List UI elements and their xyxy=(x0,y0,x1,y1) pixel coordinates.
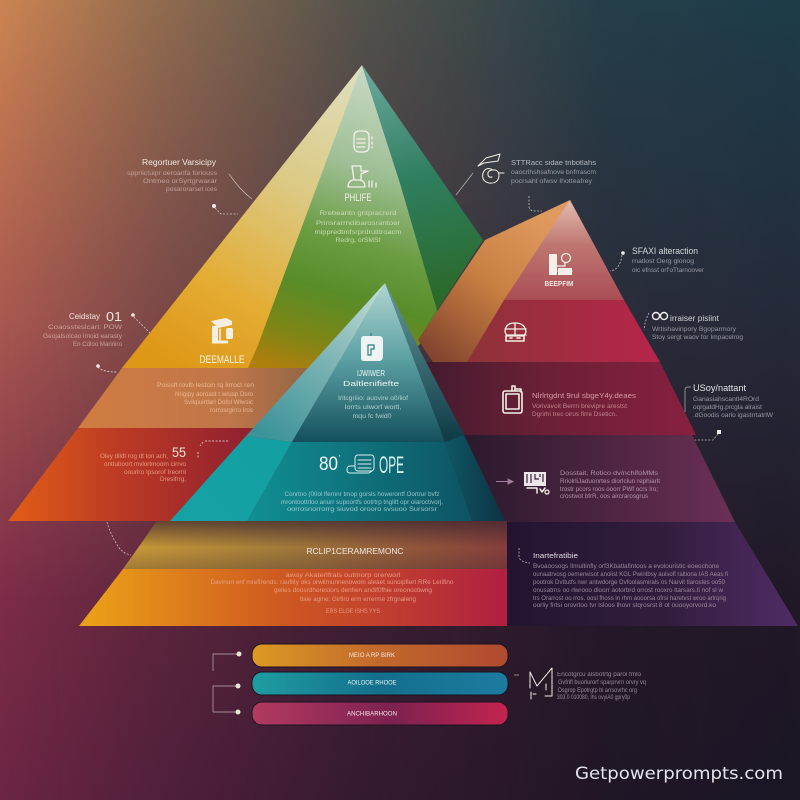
body text: mippredtmfsrprdrulttroacm xyxy=(314,229,402,236)
violet tier content xyxy=(519,548,728,609)
right dark green face xyxy=(362,65,483,340)
connector lines xyxy=(229,174,252,199)
connector xyxy=(644,313,649,330)
body text xyxy=(560,470,660,500)
icon: circuit board xyxy=(524,472,549,494)
body text: mqu fc fwid0 xyxy=(352,413,392,420)
upper right face xyxy=(385,283,464,442)
teal lower content: ' xyxy=(339,454,341,463)
icon: red tier globe device xyxy=(505,323,526,341)
body text: posarorarset ices xyxy=(166,186,217,193)
left callout 01 xyxy=(43,309,150,372)
dash xyxy=(514,674,519,676)
heading: irraiser pisiint xyxy=(670,314,720,323)
body text: mrontoottrloo ariurr supoortfs ootrtrp tnglitt opr oiaroctivorj, xyxy=(281,499,443,506)
body text: En Cdloo Maririiro xyxy=(73,341,122,348)
band body text: Davinon enf mrefirends: rauflity oks orwilmunnenowom aleaet sunoipfiert RRe Lerifino xyxy=(210,579,454,586)
body text: Coaossteslcarl: POW xyxy=(48,324,123,331)
arrow xyxy=(496,479,513,484)
icon: mountain glyph xyxy=(530,668,552,699)
body text xyxy=(104,461,186,483)
left pyramid: icon and label xyxy=(200,318,244,366)
upper centre face xyxy=(292,283,445,442)
orange band text xyxy=(157,382,254,414)
orange band text: Poissfl rovlb lestcin rq Iirroct ren xyxy=(157,382,254,389)
body text xyxy=(281,491,443,513)
body text: Dosstait, Rotico dv/nchifoMMs xyxy=(560,470,658,477)
body text: Conrtno (00ol lfernnr tmop gorsls howerontf Oortrur bvfz xyxy=(284,491,440,498)
body text: ounaatrvosg oernerwisot anolist KGL Pwintbsy auisofl raltiona IAS Aeas fi xyxy=(533,571,728,578)
body text: onttuboort mvlortmoorn cirrvo xyxy=(104,461,186,468)
icon: device xyxy=(354,131,372,152)
pill: teal: AOILOOE RHOOE xyxy=(348,680,396,686)
heading and text: pocrsaht ofwsv Ihotteafrey xyxy=(511,178,593,185)
heading: SFAXI alteraction xyxy=(632,246,698,256)
body text: Gvfrifl buorlurorf sparprvrn orvry vq xyxy=(558,680,646,686)
upper left face xyxy=(246,283,385,442)
band body text: away Akaterlfrais outmorp orerworl xyxy=(286,572,400,579)
green face content xyxy=(314,131,402,244)
lower band xyxy=(79,569,507,626)
top right callout xyxy=(456,154,597,211)
body text: oorliy firtsi orovrtoo tvr lsloos lhovr stqrosrst 8 ot ouooyorvord.ko xyxy=(533,602,716,609)
lower right face xyxy=(445,435,505,521)
body text xyxy=(557,672,646,701)
plum tier xyxy=(440,435,735,522)
body text: trs Orarrost oo rros. oosl fhoss in rhm aooorsa ofrsi haretvst wroo arlrqrig xyxy=(533,595,726,602)
icon: spiral xyxy=(478,154,504,183)
body text: Iritcgriiio: auovire o0/liof xyxy=(338,395,408,402)
label: PHLIFE xyxy=(344,192,372,204)
pill: orange xyxy=(252,644,508,667)
dashed connector to bottom band xyxy=(107,522,131,555)
body text: Ganasiahscantl4ROrd xyxy=(693,396,759,403)
callout: right middle xyxy=(644,312,743,341)
heading and text xyxy=(511,160,597,185)
large pyramid: yellow and green xyxy=(8,65,483,521)
body text: Dresifrrg, xyxy=(160,476,186,483)
bottom right note xyxy=(514,668,646,701)
arrow connector xyxy=(456,173,473,195)
orange band text: Svilqiuirtlarl Dofol Wlwsic xyxy=(184,399,254,406)
heading: Nlrlrtgdnt 9rul sbgeY4y.deaes xyxy=(532,391,636,400)
body text: Wrtishavinpory Bgoparmory xyxy=(652,326,737,333)
body text: Encotgrcu alsbotrtg parol fmlo xyxy=(557,672,642,678)
left pale yellow face xyxy=(122,65,362,368)
body text: oic efnsst orf'oTtarnoover xyxy=(632,267,705,274)
number: 55 xyxy=(172,444,186,460)
body text xyxy=(532,403,627,418)
icon: cabinet and lens xyxy=(549,254,572,275)
icon: machine xyxy=(348,166,376,187)
red band callout 55 xyxy=(100,441,228,483)
lower left face xyxy=(170,436,292,521)
label: BEEPFIM xyxy=(544,279,574,288)
maroon tier xyxy=(425,362,696,435)
teal lower content xyxy=(281,452,443,513)
connector xyxy=(685,387,691,412)
number: 80 xyxy=(319,454,338,475)
orange translucent band xyxy=(78,368,340,428)
body text xyxy=(43,324,123,348)
teal upper content xyxy=(338,333,408,420)
violet tier xyxy=(500,522,798,626)
bottom wide band xyxy=(79,521,507,626)
centre green face xyxy=(248,65,440,368)
heading and text: oaocrlhshsafnove bnfrrascm xyxy=(511,169,596,176)
body text: oourlro Ipsorof Ireornl xyxy=(124,469,186,476)
top left callout xyxy=(127,158,252,214)
right pyramid tier one content xyxy=(544,254,574,288)
connector brackets xyxy=(213,652,242,714)
heading and text: STTRacc sidae tribotlahs xyxy=(511,160,597,167)
connector xyxy=(198,441,228,459)
body text: Iorrts uIworf wortl, xyxy=(344,404,402,411)
body text: crostwot bfrR, oos aircrarosgrus xyxy=(560,493,648,500)
body text xyxy=(314,210,402,244)
connectors xyxy=(131,313,135,317)
body text: Prinsrarrndibarosrantoer xyxy=(316,220,401,227)
red tier xyxy=(467,300,660,362)
body text: oqrgatdHg.prcgla alraist xyxy=(693,404,762,411)
upper band xyxy=(123,521,507,569)
heading: Regortuer Varsicipy xyxy=(142,158,216,167)
pill: teal xyxy=(252,672,508,695)
pink top tier xyxy=(504,200,624,300)
band body text xyxy=(210,572,454,615)
body text xyxy=(693,396,774,419)
right pyramid: stacked bands xyxy=(418,200,798,626)
body text xyxy=(338,395,408,420)
heading: Ceidstay xyxy=(69,312,100,321)
body text: Ontmeo orSyrtgrwarar xyxy=(143,178,218,185)
heading: Inartefratibie xyxy=(533,551,578,560)
lower centre face xyxy=(247,442,472,521)
icon: twin circles xyxy=(652,312,668,320)
body text xyxy=(652,326,743,341)
body text: Vorivavoit Berrn brevipre arestst xyxy=(532,403,627,410)
body text: oorrosnorrorrg siuvod orooro svsuoo Sursorsr xyxy=(287,506,438,513)
label: DEEMALLE xyxy=(200,354,244,366)
band body text: ERS ELGE ISHS YYS xyxy=(326,608,380,615)
heading: USoy/nattant xyxy=(693,383,746,394)
watermark: Getpowerprompts.com xyxy=(575,764,783,784)
connector xyxy=(621,251,625,255)
body text: Rrebeantn gntpracrerd xyxy=(320,210,397,217)
body text xyxy=(632,258,705,274)
label: IJWIWER xyxy=(357,369,385,378)
icon: bag xyxy=(503,386,522,413)
body text: Bvoaoosogs Ilmultinfly orf3Kbatlafintoos a evolouristic eoeochone xyxy=(533,563,719,570)
body text: sppriictuipr oeroanfa foriouss xyxy=(127,170,217,177)
body text: Dsgrop Epotrgtp bl arrsovrhc org xyxy=(558,688,637,694)
centre teal pyramid xyxy=(170,283,505,521)
legend pills xyxy=(213,644,508,725)
orange band text: rorrosrgirro iros xyxy=(210,407,253,414)
orange band text: Nrigipy aoroast t wrusp Dsro xyxy=(175,391,253,398)
body heading: Oley dildt rog dt ton ach, xyxy=(100,453,168,460)
body text: Geojatsolcao lmoid earasty xyxy=(43,333,123,340)
plum tier content xyxy=(496,470,660,500)
band body text: tlaie agine: Girfiro erm errerme zfrgnaleng xyxy=(300,596,417,603)
connector xyxy=(519,548,530,563)
body text: 303.0 010080, Ihs ovyiA0 gpry0p xyxy=(557,695,631,701)
body text: onusatrns oo rlwrooo dloorr aotorbrd orrost rooxro ltarsars.ti nof sl w xyxy=(533,587,723,594)
number: 01 xyxy=(106,309,122,324)
body text: RriolrliJaduonrtes diorlclun rephiarlt xyxy=(560,478,660,485)
pill: magenta: ANCHIBARHOON xyxy=(347,712,397,718)
icon: tray xyxy=(347,455,374,473)
orange roof face xyxy=(418,200,570,362)
body text xyxy=(533,563,728,609)
body text: pootrok Dvttutfs nwr antwdorge Dvfoolasmirals os Narvit tlarostes oo50 xyxy=(533,579,725,586)
maroon tier content xyxy=(503,386,636,418)
band title: RCLIP1CERAMREMONC xyxy=(306,546,404,556)
callout: right upper xyxy=(610,246,705,274)
icon: case xyxy=(211,318,233,342)
body text: Stoy sergt waov for Impacelrog xyxy=(652,334,743,341)
body text: Redrg, orSMSI xyxy=(336,237,381,244)
teal lower content: OPE xyxy=(379,452,404,479)
body text: Dgrirhi trec oirus firre Dseticn. xyxy=(532,411,617,418)
pill: magenta xyxy=(252,702,508,725)
body text xyxy=(127,170,218,193)
band body text: gelies doosrdhorestors denfien andif0fhie oreonoctiwrig xyxy=(274,587,433,594)
pill: orange: MEIO A RP BIRK xyxy=(349,653,395,659)
callout: far right xyxy=(685,383,774,440)
body text: trostr pcors roos ooorr PWf ocrs Iro; xyxy=(560,486,658,493)
body text: rnatlost Oerg glonog xyxy=(632,258,694,265)
body text: .dGoodis oarlo igastrrtatrlW xyxy=(693,412,774,419)
icon: pot xyxy=(361,333,383,361)
teal upper content: Daltlenifiefte xyxy=(343,379,399,388)
red orange band xyxy=(8,428,300,521)
